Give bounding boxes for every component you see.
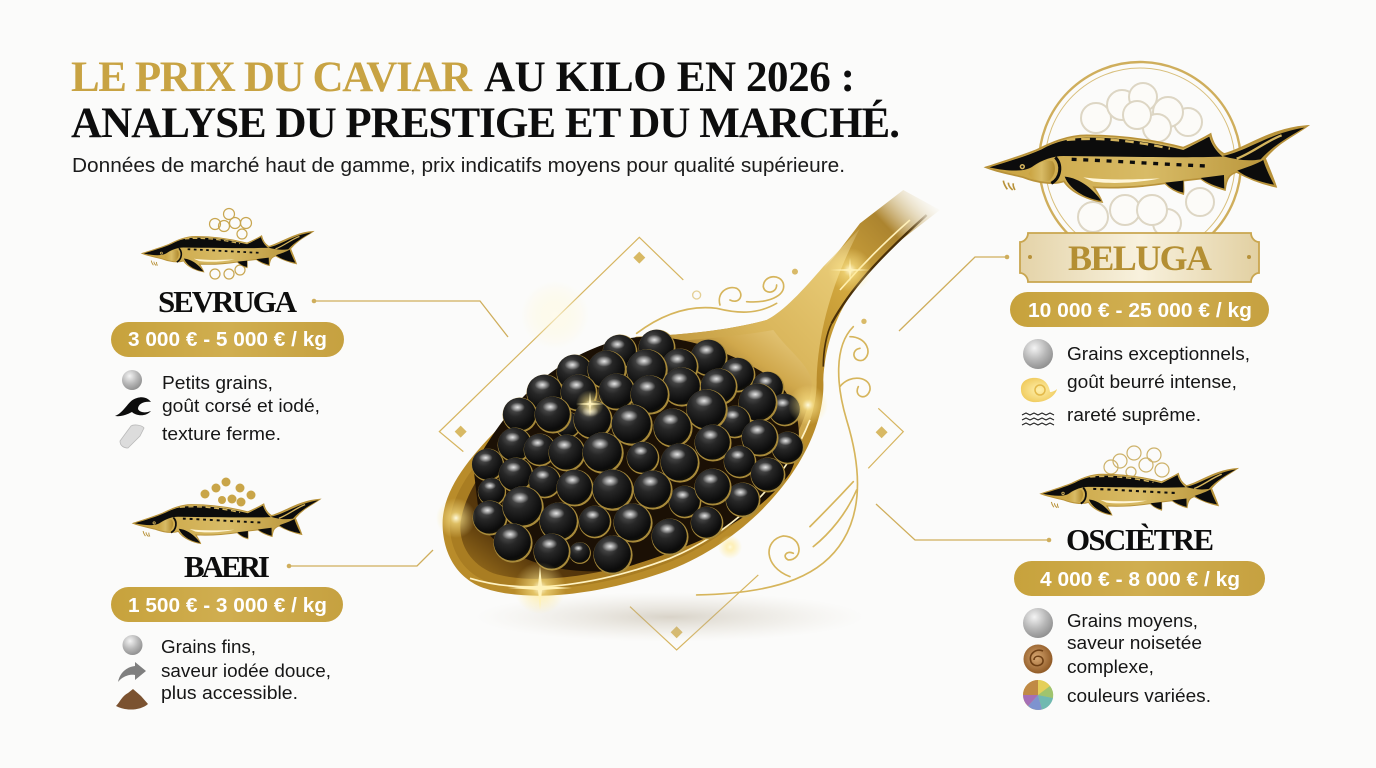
- icon: sevruga fish with roe: [142, 208, 313, 279]
- caviar grains: [472, 329, 804, 575]
- icon: oscietre fish with roe: [1041, 446, 1237, 515]
- caviar spoon: [436, 190, 940, 614]
- icon: wave: [115, 397, 151, 416]
- icon: pearl: [122, 370, 142, 390]
- text: baeri description: [161, 637, 331, 703]
- text: beluga description: Grains exceptionnels,: [1067, 344, 1250, 364]
- price pill: baeri: [111, 587, 343, 622]
- text: oscietre description: couleurs variées.: [1067, 686, 1211, 706]
- text: sevruga description: goût corsé et iodé,: [162, 396, 320, 416]
- plaque: beluga: [1020, 233, 1259, 282]
- panel: beluga: [986, 62, 1307, 425]
- dark pool under the grains: [473, 337, 799, 571]
- text: baeri description: saveur iodée douce,: [161, 661, 331, 681]
- title: AU KILO EN 2026 :: [484, 54, 855, 101]
- text: oscietre description: complexe,: [1067, 657, 1154, 677]
- text: oscietre description: [1067, 611, 1211, 706]
- icon: arrow: [118, 662, 146, 682]
- text: beluga description: rareté suprême.: [1067, 405, 1201, 425]
- text: sevruga description: texture ferme.: [162, 424, 281, 444]
- gold ornamental swirls: [637, 269, 870, 595]
- icon: colour wheel: [1023, 680, 1053, 710]
- text: oscietre description: Grains moyens,: [1067, 611, 1198, 631]
- connector lines: [289, 257, 1050, 566]
- price pill: beluga: 10 000 € - 25 000 € / kg: [1028, 300, 1252, 322]
- icon: pearl: [1023, 339, 1053, 369]
- subtitle: Données de marché haut de gamme, prix indicatifs moyens pour qualité supérieure.: [72, 155, 845, 177]
- icon: hazelnut shell: [1024, 644, 1052, 674]
- title: ANALYSE DU PRESTIGE ET DU MARCHÉ.: [71, 100, 900, 147]
- price pill: beluga: [1010, 292, 1269, 327]
- price pill: baeri: 1 500 € - 3 000 € / kg: [128, 595, 327, 617]
- text: sevruga description: [162, 373, 320, 444]
- central decorative diamond frame: [439, 237, 903, 650]
- panel: oscietre: [1014, 446, 1265, 710]
- text: beluga description: goût beurré intense,: [1067, 372, 1237, 392]
- heading: sevruga: SEVRUGA: [158, 284, 298, 319]
- icon: butter: [1021, 378, 1057, 402]
- plaque: beluga: BELUGA: [1068, 238, 1212, 278]
- panel: baeri: [111, 478, 343, 710]
- text: oscietre description: saveur noisetée: [1067, 633, 1202, 653]
- text: baeri description: plus accessible.: [161, 683, 298, 703]
- icon: pearl: [1023, 608, 1053, 638]
- icon: water waves: [1022, 413, 1054, 425]
- price pill: sevruga: 3 000 € - 5 000 € / kg: [128, 329, 327, 351]
- heading: baeri: BAERI: [184, 549, 270, 584]
- spoon shadow: [475, 592, 865, 642]
- title: LE PRIX DU CAVIAR: [71, 54, 473, 101]
- icon: pearl: [122, 635, 142, 655]
- icon: beluga medallion with fish: [986, 62, 1307, 264]
- price pill: oscietre: [1014, 561, 1265, 596]
- icon: soil: [116, 689, 148, 710]
- panel: sevruga: [111, 208, 344, 448]
- heading: oscietre: OSCIÈTRE: [1066, 522, 1214, 557]
- sparkles: [436, 248, 872, 614]
- spoon body: [443, 190, 940, 596]
- text: sevruga description: Petits grains,: [162, 373, 273, 393]
- price pill: sevruga: [111, 322, 344, 357]
- price pill: oscietre: 4 000 € - 8 000 € / kg: [1040, 569, 1240, 591]
- text: baeri description: Grains fins,: [161, 637, 256, 657]
- text: beluga description: [1067, 344, 1250, 425]
- icon: baeri fish with roe: [133, 478, 320, 543]
- title: [71, 54, 900, 147]
- icon: crystal: [120, 425, 144, 448]
